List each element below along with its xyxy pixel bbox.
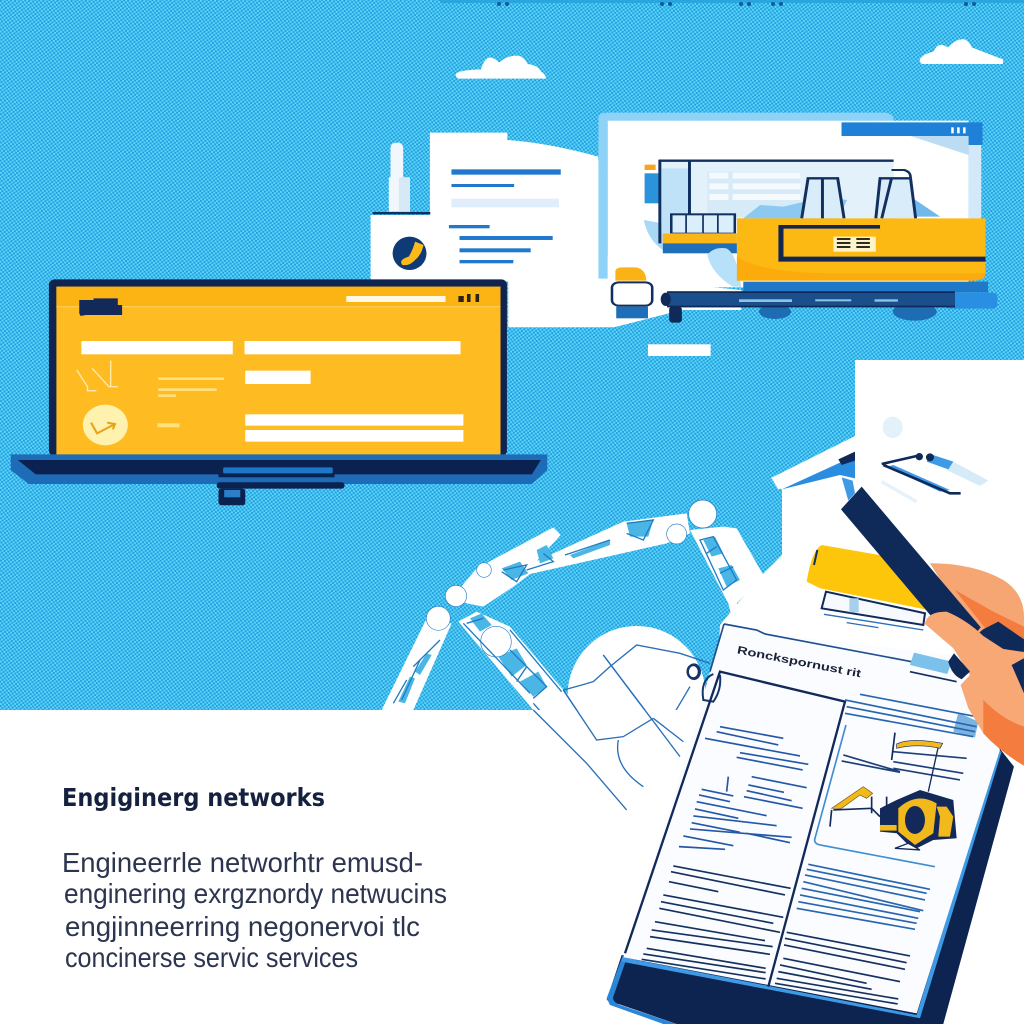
white bars <box>81 296 463 442</box>
joints <box>426 500 717 657</box>
ghost icon <box>883 417 903 438</box>
navy pen shaft <box>841 477 1024 652</box>
body paragraph: concinerse servic services <box>65 942 358 973</box>
body paragraph <box>62 847 447 973</box>
clipboard backing <box>607 747 1014 1024</box>
arm detail strokes <box>393 520 737 703</box>
robotic arm sketch <box>382 500 763 823</box>
bottom line work over band <box>533 655 683 810</box>
hand gripping pen <box>841 477 1024 766</box>
round blob <box>568 626 706 764</box>
document and monitor scene <box>371 113 997 356</box>
icon: yellow excavator <box>830 740 957 850</box>
chart panel lines <box>815 725 967 867</box>
clip rings <box>688 664 720 702</box>
cloud left <box>456 56 546 79</box>
right white panel <box>700 360 1024 1024</box>
body paragraph: Engineerrle networhtr emusd- <box>62 847 423 878</box>
yellow truck body <box>707 218 986 287</box>
body paragraph: engjinneerring negonervoi tlc <box>65 911 420 942</box>
monitor frame <box>598 113 983 287</box>
bottom white band <box>0 710 780 1024</box>
text lines right column <box>797 694 977 929</box>
pen tool over panel <box>772 417 988 630</box>
yellow stapler <box>807 545 932 630</box>
arm shaded pieces <box>398 519 740 703</box>
clipboard report <box>607 624 1014 1024</box>
pen in holder <box>373 143 430 214</box>
navy tip <box>838 452 855 465</box>
lower left arm <box>382 615 452 710</box>
laptop <box>11 279 547 505</box>
truck chassis and wheels <box>661 282 997 323</box>
navy pen end <box>1012 658 1024 693</box>
white bar <box>772 437 855 489</box>
navy grip end <box>948 653 970 679</box>
column frame <box>625 672 845 987</box>
text lines lower <box>642 866 910 1004</box>
laptop frame <box>49 279 507 456</box>
cloud right <box>920 39 1003 64</box>
lamp tool <box>882 453 988 502</box>
skin back of hand <box>930 563 1024 660</box>
bus window section <box>644 160 940 253</box>
report title: Ronckspornust rit <box>736 644 862 680</box>
lantern icon <box>612 267 652 318</box>
laptop base <box>11 454 547 484</box>
lower arm and body <box>458 612 703 823</box>
status marks <box>458 294 479 302</box>
pale text lines <box>157 377 224 427</box>
text lines left column <box>679 727 808 849</box>
report page <box>623 624 1000 1013</box>
upper boom <box>450 513 690 607</box>
icon: round check badge <box>83 405 128 445</box>
top edge marks <box>440 0 1024 6</box>
shaded palm <box>955 590 1024 643</box>
blue wedge <box>782 454 855 489</box>
machine sketch <box>77 361 118 391</box>
logo mark <box>79 298 122 316</box>
laptop stand <box>217 467 345 505</box>
body paragraph: enginering exrgznordy netwucins <box>64 878 447 909</box>
page outline <box>710 624 912 672</box>
small white label <box>648 344 711 356</box>
right arm <box>690 527 763 627</box>
header patches <box>910 653 978 737</box>
lower fingers <box>925 612 1024 766</box>
body line work <box>533 645 710 810</box>
laptop screen <box>56 287 501 455</box>
icon: round badge <box>393 237 426 270</box>
heading: Engiginerg networks <box>62 783 325 812</box>
paper sheet with text lines <box>371 133 741 327</box>
shaded wrist <box>983 700 1024 766</box>
